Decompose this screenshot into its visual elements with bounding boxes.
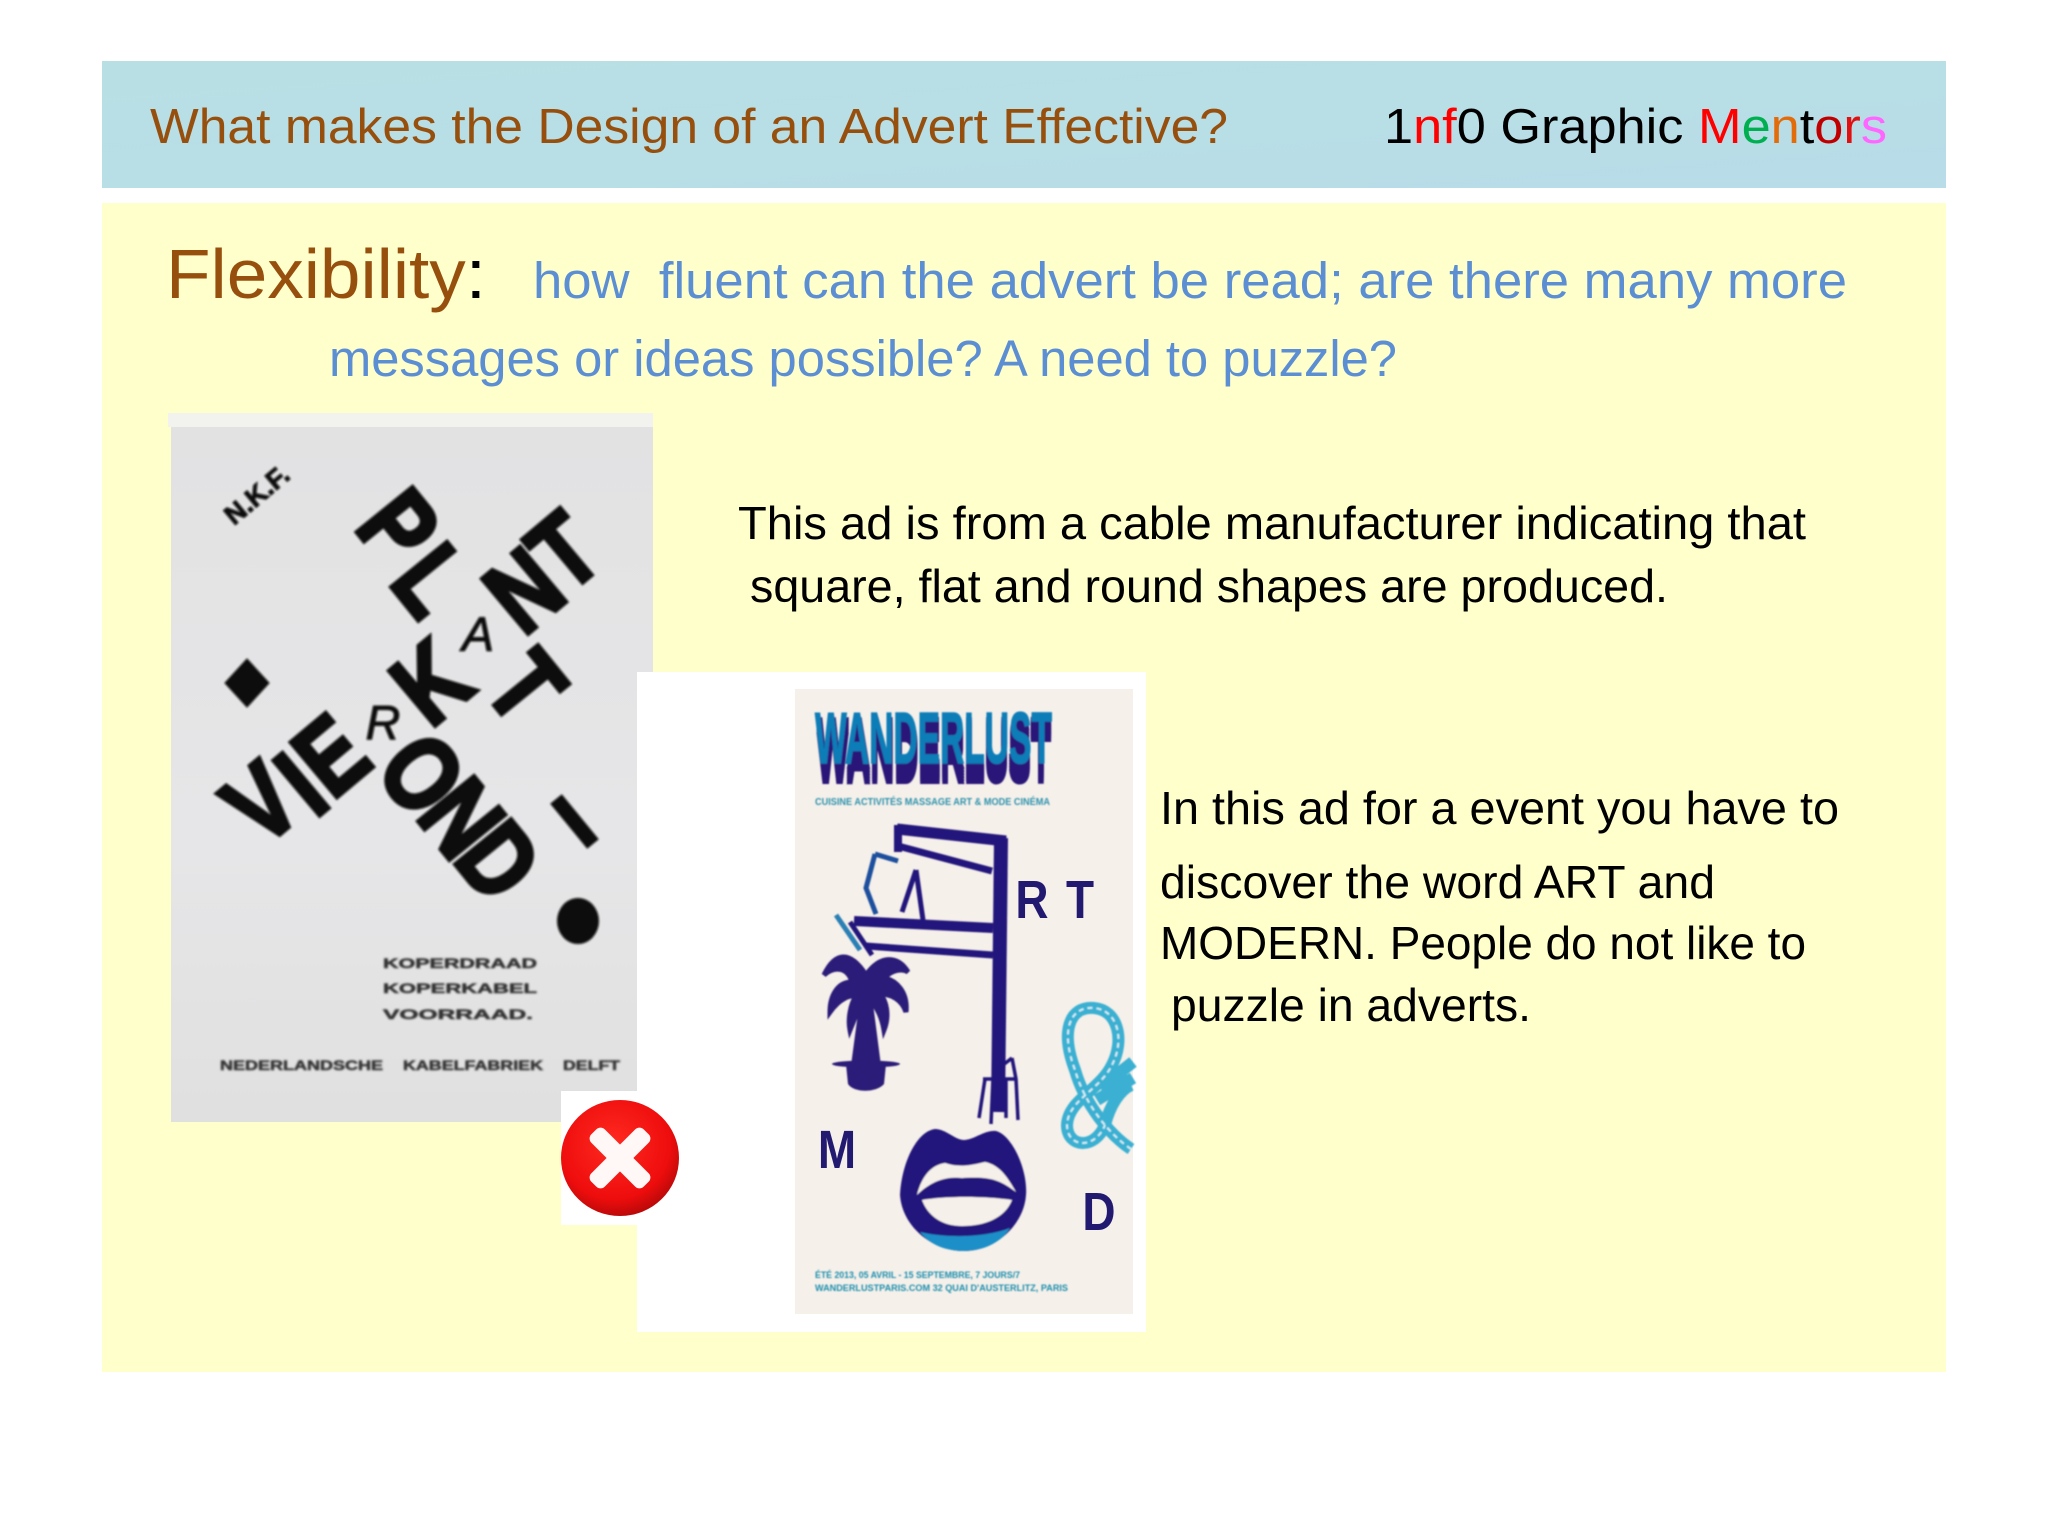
poster letters: M: [818, 1120, 856, 1180]
letter A furniture: [836, 825, 1018, 1124]
poster: Vierkant Plat Rond: T: [507, 491, 622, 613]
poster: Vierkant Plat Rond: DELFT: [563, 1057, 621, 1073]
Wanderlust wordmark: [815, 699, 1052, 799]
text block: cable manufacturer ad: [738, 497, 1806, 612]
brand name: 1nf0 Graphic Mentors: [1384, 100, 1887, 154]
poster: Vierkant Plat Rond: T: [464, 631, 587, 744]
header banner: [102, 61, 1946, 188]
poster: Vierkant Plat Rond: KOPERDRAAD: [383, 955, 537, 971]
poster: Vierkant Plat Rond: [168, 413, 653, 1122]
poster: Wanderlust: WANDERLUST: [817, 707, 1051, 787]
poster letters: R: [1015, 870, 1049, 930]
poster: Wanderlust: WANDERLUST: [817, 713, 1051, 793]
poster: Vierkant Plat Rond: KOPERKABEL: [383, 980, 538, 996]
poster: Wanderlust: [795, 689, 1133, 1314]
poster: Vierkant Plat Rond: E: [273, 693, 391, 819]
title: What makes the Design of an Advert Effective?: [150, 100, 1228, 154]
white image panel: [637, 672, 1146, 1332]
poster: Vierkant Plat Rond: R: [366, 697, 400, 750]
poster: Wanderlust: WANDERLUST: [817, 716, 1051, 796]
poster: Vierkant Plat Rond: NEDERLANDSCHE: [220, 1057, 383, 1073]
subheading text: [329, 252, 1847, 387]
lips: [900, 1129, 1026, 1251]
poster: Wanderlust: WANDERLUST: [815, 699, 1052, 779]
poster letters: T: [1066, 870, 1094, 930]
text block: cable manufacturer ad: square, flat and round shapes are produced.: [750, 560, 1668, 612]
icon: red cross badge: [561, 1091, 679, 1225]
text block: Wanderlust ad: [1160, 782, 1839, 1031]
text block: Wanderlust ad: In this ad for a event you have to: [1160, 782, 1839, 834]
poster: Vierkant Plat Rond: N: [397, 758, 526, 879]
poster footer text: ÉTÉ 2013, 05 AVRIL - 15 SEPTEMBRE, 7 JOURS/7: [815, 1270, 1020, 1280]
poster letters: D: [1082, 1182, 1116, 1242]
text block: Wanderlust ad: puzzle in adverts.: [1171, 979, 1531, 1031]
poster footer text: [815, 1270, 1068, 1293]
heading: Flexibility: Flexibility:: [166, 235, 486, 313]
content panel: [102, 203, 1946, 1372]
poster: Vierkant Plat Rond: A: [459, 608, 494, 661]
poster: Vierkant Plat Rond: L: [370, 524, 493, 637]
subheading text: messages or ideas possible? A need to puzzle?: [329, 330, 1397, 387]
poster: Vierkant Plat Rond: VOORRAAD.: [383, 1006, 533, 1022]
rope ampersand: [1067, 1008, 1133, 1149]
poster: Wanderlust: WANDERLUST: [817, 719, 1051, 799]
poster footer text: WANDERLUSTPARIS.COM 32 QUAI D'AUSTERLITZ, PARIS: [815, 1283, 1068, 1293]
poster: Vierkant Plat Rond: V: [203, 741, 321, 867]
poster: Wanderlust: WANDERLUST: [817, 710, 1051, 790]
poster: Vierkant Plat Rond: P: [335, 469, 461, 586]
poster: Vierkant Plat Rond: D: [434, 801, 563, 922]
poster: Vierkant Plat Rond: KABELFABRIEK: [403, 1057, 543, 1073]
poster: Vierkant Plat Rond: N: [464, 527, 585, 655]
text block: Wanderlust ad: MODERN. People do not like to: [1160, 917, 1806, 969]
text block: Wanderlust ad: discover the word ART and: [1160, 856, 1715, 908]
palm in hat: [824, 957, 908, 1091]
poster category row: CUISINE ACTIVITÉS MASSAGE ART & MODE CINÉMA: [815, 795, 1050, 808]
poster: Vierkant Plat Rond: I: [255, 733, 348, 837]
text block: cable manufacturer ad: This ad is from a cable manufacturer indicating that: [738, 497, 1806, 549]
poster letters: [818, 870, 1116, 1242]
poster: Wanderlust: WANDERLUST: [817, 704, 1051, 784]
poster: Vierkant Plat Rond: N.K.F.: [219, 459, 295, 531]
subheading text: how fluent can the advert be read; are there many more: [533, 252, 1847, 309]
poster: Vierkant Plat Rond: K: [371, 619, 492, 747]
poster: Vierkant Plat Rond: O: [355, 712, 487, 837]
